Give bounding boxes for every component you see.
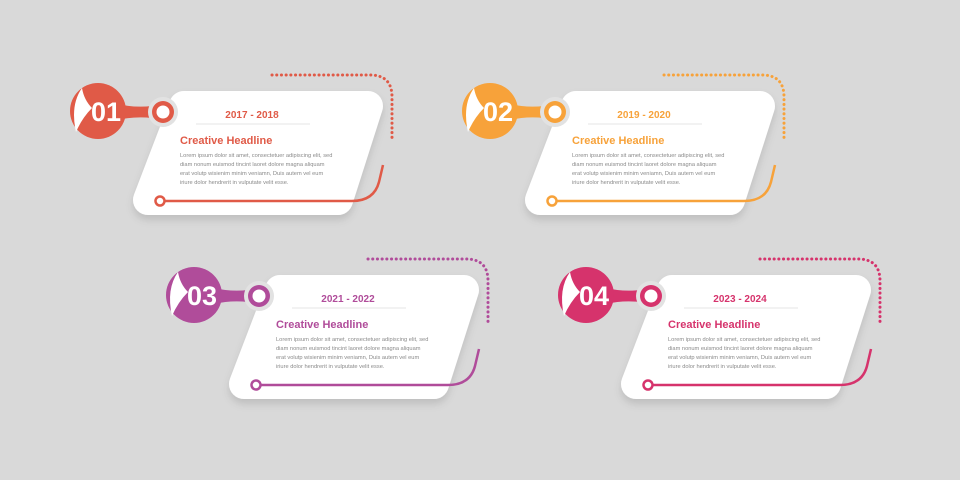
timeline line xyxy=(653,349,871,385)
year: 2021 - 2022 xyxy=(321,294,375,305)
year: 2019 - 2020 xyxy=(617,110,671,121)
timeline line xyxy=(557,165,775,201)
badge xyxy=(558,267,666,323)
headline: Creative Headline xyxy=(668,319,760,331)
body text: diam nonum euismod tincint laoret dolore magna aliquam xyxy=(668,346,813,352)
card xyxy=(636,290,856,384)
body text xyxy=(572,153,724,186)
body text xyxy=(668,337,820,370)
body text: Lorem ipsum dolor sit amet, consectetuer adipiscing elit, sed xyxy=(572,153,724,159)
dotted arc xyxy=(664,75,784,140)
body text: erat volutp wisienim minim veniamn, Duis autem vel eum xyxy=(668,355,811,361)
end ring xyxy=(252,380,260,390)
badge: 04 xyxy=(579,281,609,311)
dotted arc xyxy=(368,259,488,324)
body text: iriure dolor hendrerit in vulputate velit esse. xyxy=(668,364,777,370)
badge: 02 xyxy=(483,97,513,127)
timeline line xyxy=(165,165,383,201)
timeline line xyxy=(261,349,479,385)
dotted arc xyxy=(272,75,392,140)
body text: Lorem ipsum dolor sit amet, consectetuer adipiscing elit, sed xyxy=(276,337,428,343)
dotted arc xyxy=(760,259,880,324)
body text: iriure dolor hendrerit in vulputate velit esse. xyxy=(276,364,385,370)
panel: step 01 xyxy=(70,75,392,206)
body text: iriure dolor hendrerit in vulputate velit esse. xyxy=(572,180,681,186)
body text xyxy=(180,153,332,186)
body text: diam nonum euismod tincint laoret dolore magna aliquam xyxy=(276,346,421,352)
card xyxy=(244,290,464,384)
body text xyxy=(276,337,428,370)
badge: 03 xyxy=(187,281,217,311)
body text: Lorem ipsum dolor sit amet, consectetuer adipiscing elit, sed xyxy=(180,153,332,159)
body text: Lorem ipsum dolor sit amet, consectetuer adipiscing elit, sed xyxy=(668,337,820,343)
headline: Creative Headline xyxy=(276,319,368,331)
panel: step 03 xyxy=(166,259,488,390)
card xyxy=(540,106,760,200)
year: 2017 - 2018 xyxy=(225,110,279,121)
headline: Creative Headline xyxy=(572,135,664,147)
panel: step 04 xyxy=(558,259,880,390)
body text: erat volutp wisienim minim veniamn, Duis autem vel eum xyxy=(572,171,715,177)
body text: iriure dolor hendrerit in vulputate velit esse. xyxy=(180,180,289,186)
badge xyxy=(166,267,274,323)
year: 2023 - 2024 xyxy=(713,294,767,305)
end ring xyxy=(156,196,164,206)
badge: 01 xyxy=(91,97,121,127)
headline: Creative Headline xyxy=(180,135,272,147)
card xyxy=(148,106,368,200)
badge xyxy=(70,83,178,139)
body text: diam nonum euismod tincint laoret dolore magna aliquam xyxy=(572,162,717,168)
body text: erat volutp wisienim minim veniamn, Duis autem vel eum xyxy=(180,171,323,177)
body text: diam nonum euismod tincint laoret dolore magna aliquam xyxy=(180,162,325,168)
badge xyxy=(462,83,570,139)
body text: erat volutp wisienim minim veniamn, Duis autem vel eum xyxy=(276,355,419,361)
end ring xyxy=(548,196,556,206)
end ring xyxy=(644,380,652,390)
panel: step 02 xyxy=(462,75,784,206)
